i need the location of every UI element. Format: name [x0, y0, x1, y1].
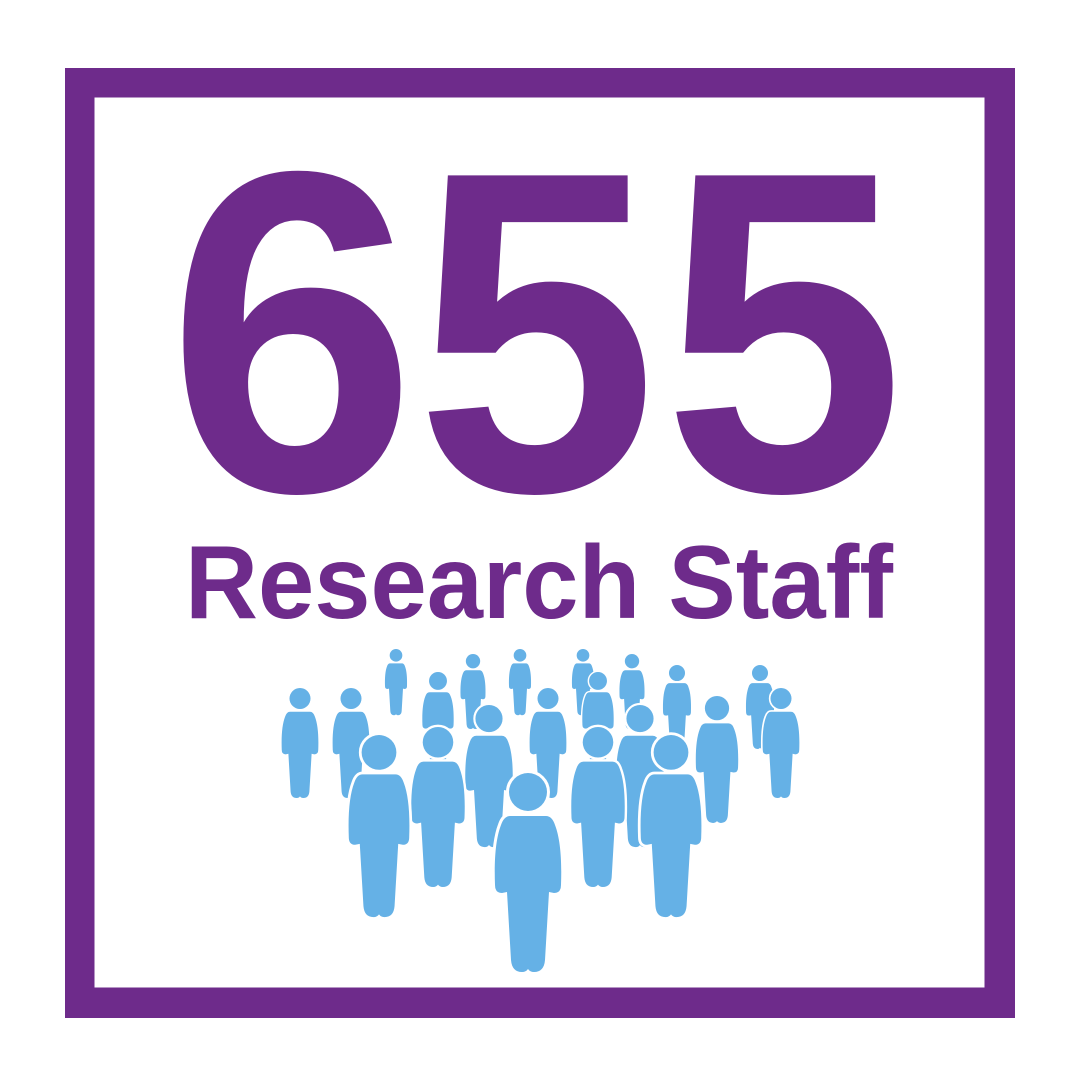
big number: 5 [663, 76, 905, 588]
purple frame [65, 68, 1015, 1018]
big number [167, 76, 905, 588]
big number: 6 [167, 77, 417, 588]
icon: crowd of people [282, 649, 799, 972]
subtitle: Research Staff [185, 525, 893, 641]
big number: 5 [415, 76, 657, 588]
